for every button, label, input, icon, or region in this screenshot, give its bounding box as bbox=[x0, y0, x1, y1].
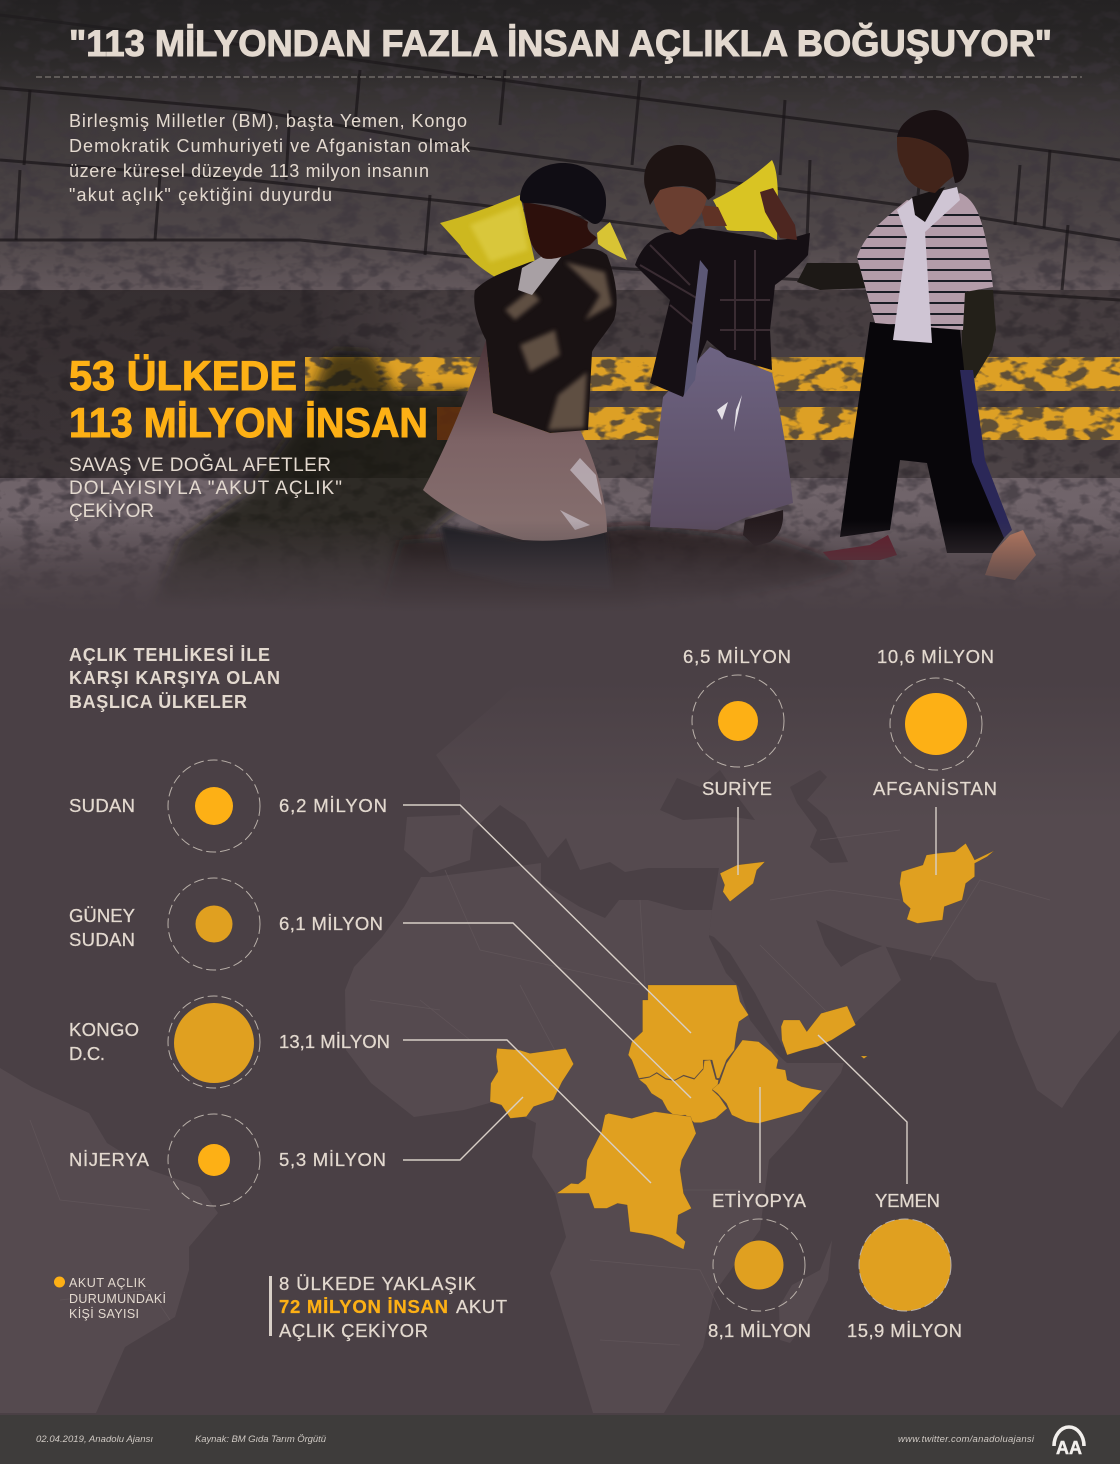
stone texture bbox=[0, 0, 1120, 620]
sea: Black Sea bbox=[660, 770, 755, 820]
darker rough stone course bbox=[0, 240, 1120, 620]
hair bbox=[644, 145, 716, 205]
legend: KİŞİ SAYISI bbox=[69, 1307, 139, 1321]
footer: date: 02.04.2019, Anadolu Ajansı bbox=[36, 1434, 153, 1445]
row: Sudan bbox=[69, 760, 387, 852]
scarf bbox=[893, 187, 960, 343]
callout: 72 million: 72 MİLYON İNSAN bbox=[279, 1296, 448, 1317]
yellow sack bbox=[713, 160, 778, 240]
country: Ethiopia bbox=[712, 1040, 822, 1123]
country: Syria bbox=[720, 862, 765, 902]
callout: Yemen bbox=[847, 1190, 962, 1341]
callout: Syria: 6,5 MİLYON bbox=[683, 646, 791, 667]
dark band bbox=[0, 290, 1120, 478]
section heading: AÇLIK TEHLİKESİ İLE bbox=[69, 645, 270, 665]
photo: children carrying sacks in front of a stone wall bbox=[0, 0, 1120, 626]
legend bbox=[54, 1276, 166, 1321]
callout: 72 million: AÇLIK ÇEKİYOR bbox=[279, 1320, 428, 1341]
callout: Yemen: 15,9 MİLYON bbox=[847, 1320, 962, 1341]
row: DR Congo bbox=[69, 996, 390, 1088]
hair bbox=[897, 110, 969, 183]
jacket light patches bbox=[505, 262, 612, 430]
landmass: Eurasia bbox=[404, 680, 1120, 1108]
child 1 bbox=[423, 163, 627, 590]
right shoe bbox=[985, 530, 1036, 580]
callout: Ethiopia: 8,1 MİLYON bbox=[708, 1320, 811, 1341]
footer: twitter url: www.twitter.com/anadoluajansi bbox=[898, 1434, 1035, 1445]
arm bbox=[797, 263, 877, 290]
robe highlights bbox=[717, 395, 742, 432]
left darkening bbox=[0, 290, 430, 478]
yellow sack bbox=[440, 195, 535, 277]
landmass: Madagascar bbox=[779, 1240, 832, 1343]
shadow patch row 2 bbox=[437, 407, 482, 440]
row: Nigeria: NİJERYA bbox=[69, 1149, 150, 1170]
sea: Caspian bbox=[790, 770, 848, 863]
callout: Afghanistan bbox=[873, 646, 997, 799]
country: Yemen bbox=[781, 1006, 856, 1055]
headline: 53 countries, 113 million: 113 MİLYON İNSAN bbox=[69, 399, 428, 446]
icon: Anadolu Ajansı logo bbox=[1054, 1427, 1084, 1458]
white collar stripe bbox=[684, 260, 708, 395]
sack highlight bbox=[470, 205, 528, 262]
row: South Sudan bbox=[69, 878, 383, 970]
white shirt bbox=[518, 240, 570, 295]
icon: Anadolu Ajansı logo: AA bbox=[1056, 1438, 1082, 1458]
jacket lines bbox=[640, 245, 770, 360]
landmass: Africa bbox=[345, 863, 844, 1413]
landmass: South America bbox=[0, 1068, 218, 1413]
sack behind bbox=[597, 222, 627, 260]
neck bbox=[912, 187, 945, 222]
wall background bbox=[0, 0, 1120, 625]
hair bbox=[520, 163, 606, 224]
sub headline: SAVAŞ VE DOĞAL AFETLER bbox=[69, 454, 331, 476]
country: Sudan bbox=[628, 985, 749, 1080]
legend: DURUMUNDAKİ bbox=[69, 1292, 166, 1306]
callout: Afghanistan: AFGANİSTAN bbox=[873, 778, 997, 799]
callout: 72 million: AKUT bbox=[456, 1296, 507, 1317]
ground shadow bbox=[380, 525, 860, 612]
row: DR Congo: D.C. bbox=[69, 1043, 105, 1064]
child 2 bbox=[635, 145, 810, 546]
headline: 53 countries, 113 million: 53 ÜLKEDE bbox=[69, 352, 297, 399]
intro paragraph: üzere küresel düzeyde 113 milyon insanın bbox=[69, 161, 429, 181]
sleeve and right arm bbox=[962, 290, 996, 378]
bottom fade bbox=[0, 520, 1120, 626]
sub headline: DOLAYISIYLA "AKUT AÇLIK" bbox=[69, 478, 342, 499]
callout: 72 million bbox=[269, 1273, 507, 1341]
face bbox=[523, 202, 597, 259]
highlighted countries bbox=[490, 843, 994, 1249]
pant stripe bbox=[960, 370, 1012, 538]
country: Nigeria bbox=[490, 1048, 574, 1118]
row: Nigeria: 5,3 MİLYON bbox=[279, 1149, 386, 1170]
callout: Syria bbox=[683, 646, 791, 799]
robe bbox=[423, 340, 607, 541]
row: Sudan: SUDAN bbox=[69, 795, 135, 816]
callout: Afghanistan: 10,6 MİLYON bbox=[877, 646, 994, 667]
footer bbox=[0, 1415, 1120, 1464]
footer: source: Kaynak: BM Gıda Tarım Örgütü bbox=[195, 1434, 327, 1445]
intro paragraph: Demokratik Cumhuriyeti ve Afganistan olmak bbox=[69, 136, 471, 156]
row: Nigeria bbox=[69, 1114, 386, 1206]
section heading: KARŞI KARŞIYA OLAN bbox=[69, 668, 280, 688]
legend: AKUT AÇLIK bbox=[69, 1276, 147, 1290]
row: South Sudan: GÜNEY bbox=[69, 905, 135, 926]
robe bbox=[650, 347, 793, 530]
title divider bbox=[36, 76, 1082, 78]
callout: 72 million: 8 ÜLKEDE YAKLAŞIK bbox=[279, 1273, 477, 1294]
top darkening bbox=[0, 0, 1120, 90]
callout: Syria: SURİYE bbox=[702, 778, 772, 799]
sub headline: ÇEKİYOR bbox=[69, 501, 154, 522]
yellow stripes bbox=[305, 357, 1120, 440]
brick joints bbox=[0, 15, 1120, 300]
face bbox=[652, 187, 707, 235]
hand at ear bbox=[700, 205, 727, 226]
island: Socotra bbox=[861, 1056, 867, 1059]
striped shirt bbox=[857, 193, 993, 330]
intro paragraph: "akut açlık" çektiğini duyurdu bbox=[69, 185, 332, 205]
foot bbox=[743, 510, 783, 546]
row: South Sudan: SUDAN bbox=[69, 929, 135, 950]
world map bbox=[0, 680, 1120, 1413]
row: South Sudan: 6,1 MİLYON bbox=[279, 913, 383, 934]
country borders bbox=[30, 830, 1050, 1345]
row: DR Congo: KONGO bbox=[69, 1019, 139, 1040]
pants bbox=[840, 322, 1010, 553]
callout: Ethiopia bbox=[708, 1190, 811, 1341]
child 3 bbox=[797, 110, 1036, 580]
jacket bbox=[635, 228, 810, 397]
face bbox=[897, 137, 955, 193]
sub headline bbox=[69, 454, 342, 522]
intro paragraph bbox=[69, 111, 471, 205]
legs bbox=[440, 525, 612, 590]
section heading bbox=[69, 645, 280, 712]
country: South Sudan bbox=[639, 1060, 727, 1123]
section heading: BAŞLICA ÜLKELER bbox=[69, 692, 247, 712]
headline: 53 countries, 113 million bbox=[69, 352, 428, 446]
jacket bbox=[474, 249, 617, 433]
row: DR Congo: 13,1 MİLYON bbox=[279, 1031, 390, 1052]
left shoe bbox=[823, 535, 897, 560]
hand bbox=[760, 188, 797, 240]
robe light folds bbox=[560, 458, 602, 530]
country: Afghanistan bbox=[900, 843, 994, 923]
wall shadow of children bbox=[150, 350, 640, 612]
intro paragraph: Birleşmiş Milletler (BM), başta Yemen, Kongo bbox=[69, 111, 467, 131]
callout: Yemen: YEMEN bbox=[875, 1190, 940, 1211]
country: DR Congo bbox=[557, 1112, 696, 1249]
leader lines bbox=[403, 805, 936, 1184]
callout: Ethiopia: ETİYOPYA bbox=[712, 1190, 807, 1211]
title: "113 MİLYONDAN FAZLA İNSAN AÇLIKLA BOĞUŞUYOR" bbox=[69, 23, 1052, 64]
row: Sudan: 6,2 MİLYON bbox=[279, 795, 387, 816]
